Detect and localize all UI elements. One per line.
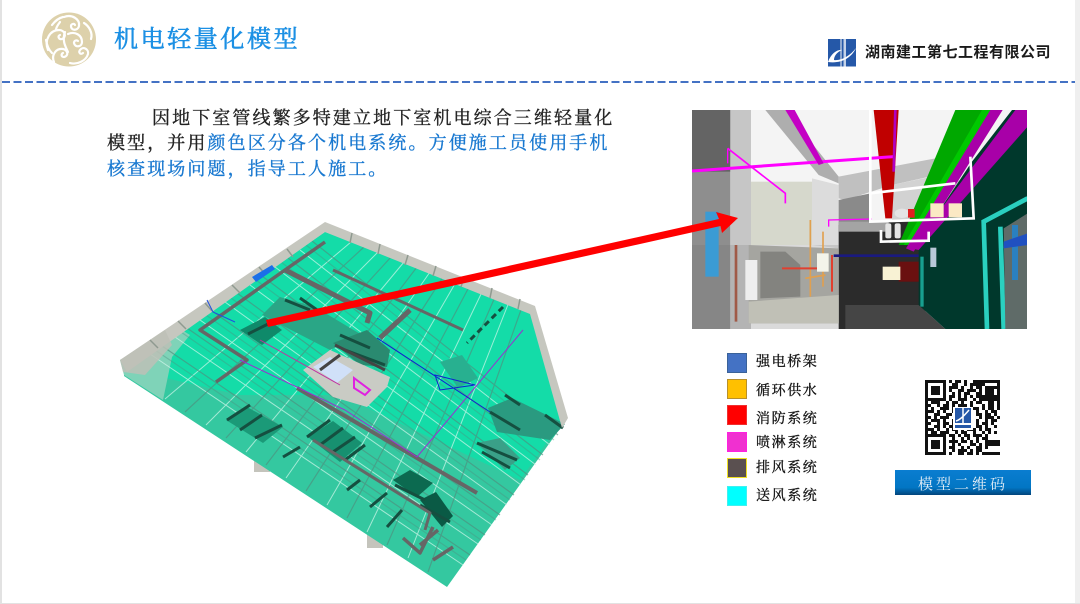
legend: 循环供水 bbox=[756, 384, 818, 399]
legend: 消防系统 bbox=[756, 412, 818, 427]
machine room bbox=[303, 350, 390, 407]
support legs bbox=[254, 457, 383, 548]
green pipe bbox=[899, 110, 995, 245]
cyan door bbox=[984, 198, 1028, 329]
door frame bbox=[732, 245, 740, 322]
thin pipes bbox=[207, 300, 523, 457]
icon: gold cloud emblem bbox=[42, 12, 96, 66]
blue panel bbox=[705, 212, 719, 277]
cream boxes bbox=[930, 203, 962, 217]
legend: 强电桥架 bbox=[756, 355, 818, 370]
dark bars bbox=[227, 298, 563, 527]
valves bbox=[885, 209, 909, 238]
text block: description: 模型，并用颜色区分各个机电系统。方便施工员使用手机 bbox=[107, 133, 610, 153]
company name: 湖南建工第七工程有限公司 bbox=[865, 44, 1051, 61]
grid lines bbox=[150, 242, 550, 565]
lit sign bbox=[899, 262, 919, 282]
button: QR caption: 模型二维码 bbox=[918, 477, 1008, 493]
QR code bbox=[925, 380, 1000, 455]
dark equipment blocks bbox=[226, 297, 565, 527]
fire pipe bbox=[874, 110, 899, 218]
orange pipes bbox=[805, 220, 825, 297]
title: 机电轻量化模型 bbox=[114, 27, 300, 53]
outer wall bbox=[120, 222, 568, 428]
text block: description: 因地下室管线繁多特建立地下室机电综合三维轻量化 bbox=[152, 108, 614, 128]
legend: 排风系统 bbox=[756, 461, 818, 476]
image: interior MEP 3D view bbox=[692, 110, 1027, 329]
legend: 喷淋系统 bbox=[756, 436, 818, 451]
white hanger frame bbox=[870, 110, 974, 242]
text block: description bbox=[107, 108, 614, 179]
legend: 送风系统 bbox=[756, 489, 818, 504]
floor slab bbox=[124, 232, 566, 587]
legend bbox=[727, 353, 818, 506]
button: QR caption bbox=[895, 470, 1031, 495]
text block: description: 核查现场问题，指导工人施工。 bbox=[107, 159, 388, 179]
sprinkler pipes bbox=[692, 110, 895, 227]
icon: company logo bbox=[828, 39, 856, 66]
ducts bbox=[200, 242, 477, 560]
purple pipes bbox=[906, 110, 1028, 252]
